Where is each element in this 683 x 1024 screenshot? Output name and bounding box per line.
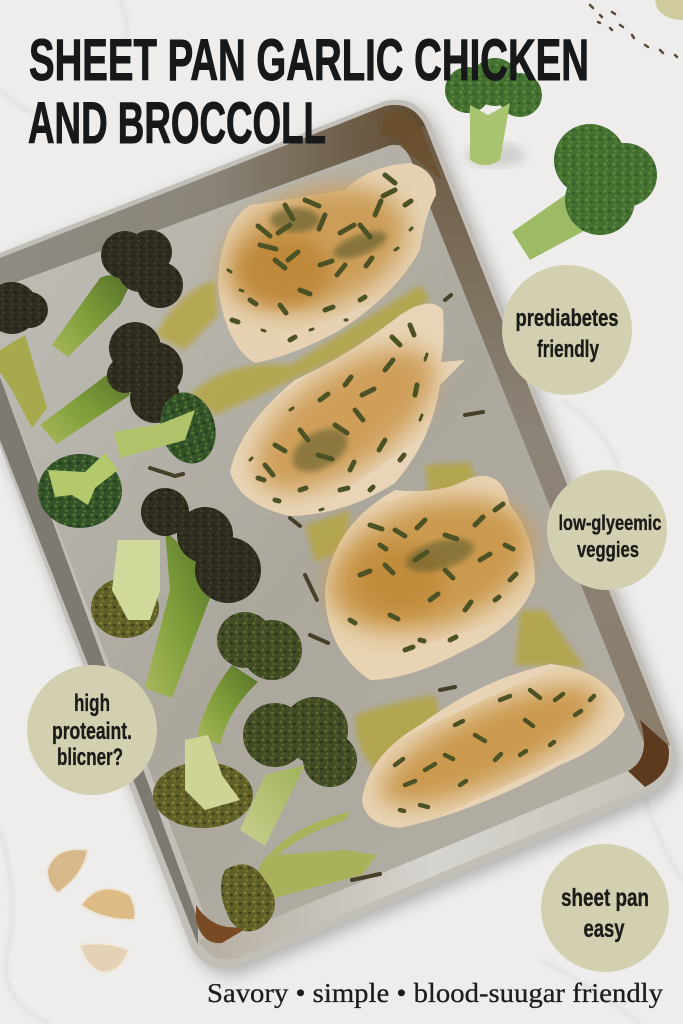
garlic clove 1 [47, 849, 88, 893]
badge: sheet pan easy: sheet pan [561, 884, 649, 912]
broccoli floret bottom left [153, 735, 253, 828]
badge: high proteaint blicner [27, 665, 157, 795]
badge: sheet pan easy [541, 844, 669, 972]
broccoli floret cut side [91, 540, 160, 638]
chicken breast 3 [311, 474, 549, 680]
broccoli floret centre [197, 612, 302, 745]
broccoli floret bottom centre [240, 697, 357, 846]
broccoli floret left top [52, 230, 183, 357]
chicken breast 2 [230, 304, 465, 520]
badge: sheet pan easy: easy [584, 915, 625, 943]
broccoli floret small green [114, 386, 223, 470]
title [28, 28, 589, 156]
badge: prediabetes friendly [502, 265, 632, 395]
broccoli floret long stem [141, 488, 261, 698]
spice specks and corner garnish [590, 0, 683, 57]
chicken breast 4 [362, 662, 625, 828]
badge: low-glyeemic veggies: veggies [577, 537, 639, 562]
garlic cloves [47, 849, 135, 972]
badge: high proteaint blicner: proteaint. [52, 718, 132, 745]
roasted broccoli [0, 230, 377, 931]
title: AND BROCCOLL [28, 91, 326, 156]
broccoli floret far left [0, 282, 48, 428]
badge: prediabetes friendly: friendly [537, 336, 599, 363]
debris on pan [150, 295, 483, 880]
badge: high proteaint blicner: high [74, 690, 110, 717]
garlic clove 2 [81, 888, 135, 920]
badge: prediabetes friendly: prediabetes [516, 305, 618, 332]
badge: low-glyeemic veggies [547, 470, 667, 590]
broccoli floret centre left [40, 322, 183, 444]
broccoli floret bottom [221, 812, 377, 931]
chicken breast 1 [206, 163, 436, 363]
fresh broccoli top [445, 58, 542, 167]
tagline: Savory • simple • blood-suugar friendly [207, 978, 664, 1008]
badge: high proteaint blicner: blicner? [57, 744, 123, 771]
fresh broccoli right [512, 124, 657, 260]
broccoli floret left middle [38, 453, 122, 528]
olive oil drippings [155, 280, 585, 770]
garlic clove 3 [80, 943, 129, 972]
